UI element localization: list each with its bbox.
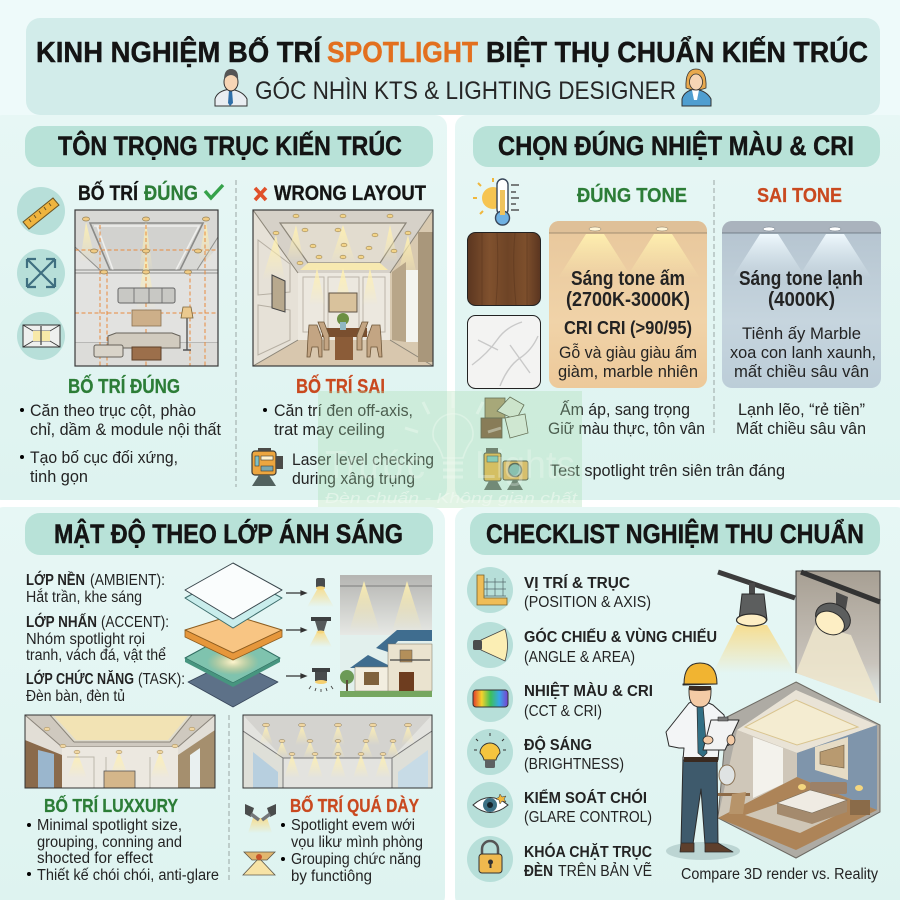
heading pill <box>473 126 880 167</box>
bullet list: correct <box>20 401 221 486</box>
note: warm result: Giữ màu thực, tôn vân <box>548 419 705 438</box>
check item: brightness <box>467 729 624 775</box>
icon: laser level <box>252 448 283 486</box>
check item: lock axis: KHÓA CHẶT TRỤC <box>524 842 652 861</box>
panel: tôn trọng trục kiến trúc <box>0 115 447 500</box>
icon: lighting designer <box>682 69 711 106</box>
layer text: accent: LỚP NHẤN <box>26 613 97 631</box>
title banner <box>26 18 880 115</box>
illustration: correct layout room <box>75 210 218 366</box>
layer text: task: (TASK): <box>138 671 185 688</box>
swatch: marble <box>468 316 540 388</box>
check item: glare control <box>467 782 652 828</box>
check item: lock axis: TRÊN BẢN VẼ <box>558 863 652 880</box>
illustration: engineer <box>666 663 740 860</box>
layer text: task <box>26 670 185 705</box>
heading pill: MẬT ĐỘ THEO LỚP ÁNH SÁNG <box>54 518 403 549</box>
bullet list: wrong: Căn trí đen off-axis, <box>274 401 413 420</box>
title: KINH NGHIỆM BỐ TRÍ <box>36 35 322 69</box>
bullet list: dense: vọu likư mình phòng <box>291 834 423 851</box>
bullet list: dense: Grouping chức năng <box>291 851 421 868</box>
card: warm tone <box>549 221 707 388</box>
illustration: villa with spotlights <box>340 575 432 697</box>
caption: bố trí đúng: BỐ TRÍ ĐÚNG <box>68 374 180 398</box>
heading pill: TÔN TRỌNG TRỤC KIẾN TRÚC <box>58 130 402 161</box>
layer text: accent: tranh, vách đá, vật thể <box>26 647 166 664</box>
watermark: Đèn chuẩn - Không gian chất <box>325 490 578 507</box>
layer text: accent <box>26 613 169 664</box>
icon: cross arrows <box>17 249 65 297</box>
title: BIỆT THỤ CHUẨN KIẾN TRÚC <box>486 35 868 69</box>
caption: bố trí quá dày: BỐ TRÍ QUÁ DÀY <box>290 795 420 816</box>
note: laser level: Laser level checking <box>292 450 434 469</box>
card: cold tone: xoa con lanh xaunh, <box>730 343 876 362</box>
card: warm tone: Gỗ và giàu giàu ấm <box>559 343 697 362</box>
check item: position and axis <box>467 567 651 613</box>
bullet list: dense: by functiông <box>291 868 372 885</box>
arrows <box>286 591 306 678</box>
bullet list: wrong: trat may ceiling <box>274 420 385 439</box>
check item: position and axis: (POSITION & AXIS) <box>524 594 651 611</box>
icon: ruler <box>17 187 65 235</box>
heading: sai tone: SAI TONE <box>757 184 842 207</box>
icon: accent spotlight <box>309 617 332 647</box>
card: cold tone: mất chiều sâu vân <box>734 362 869 381</box>
note: cold result: Lạnh lẽo, “rẻ tiền” <box>738 400 865 419</box>
note: laser level: during xâng trụng <box>292 469 415 488</box>
icon: material samples <box>481 397 528 438</box>
check item: position and axis: VỊ TRÍ & TRỤC <box>524 573 630 592</box>
layer text: ambient: LỚP NỀN <box>26 571 85 589</box>
card: warm tone: CRI CRI (>90/95) <box>564 318 692 338</box>
layer text: task: Đèn bàn, đèn tủ <box>26 688 125 705</box>
heading: wrong layout: WRONG LAYOUT <box>274 182 426 205</box>
check item: cct and cri: (CCT & CRI) <box>524 703 602 720</box>
bullet list: correct: Tạo bố cục đối xứng, <box>30 448 178 467</box>
icon: ambient downlight <box>307 578 334 607</box>
caption: compare render: Compare 3D render vs. Reality <box>681 866 878 883</box>
icon: paired spotlights <box>245 804 276 833</box>
caption: bố trí luxxury: BỐ TRÍ LUXXURY <box>44 795 179 816</box>
bullet list: luxury: Minimal spotlight size, <box>37 817 182 834</box>
check item: lock axis <box>467 836 652 882</box>
icon: grouped lights <box>243 852 275 875</box>
panel: checklist nghiệm thu chuẩn <box>455 507 900 900</box>
check item: angle and area <box>467 622 717 668</box>
divider <box>235 180 237 487</box>
title <box>36 35 868 69</box>
icon: sun thermometer <box>473 178 519 225</box>
layer text: ambient: Hắt trần, khe sáng <box>26 589 142 606</box>
heading pill <box>25 126 433 167</box>
bullet list: correct: Căn theo trục cột, phào <box>30 401 196 420</box>
subtitle: GÓC NHÌN KTS & LIGHTING DESIGNER <box>255 76 676 105</box>
watermark: Lights <box>475 444 575 487</box>
illustration: track spotlight <box>713 572 795 673</box>
swatch: wood <box>468 232 540 306</box>
heading pill <box>25 513 433 555</box>
icon: architect <box>215 69 247 106</box>
bullet list: luxury: shocted for effect <box>37 850 154 867</box>
watermark <box>318 391 582 508</box>
divider <box>228 715 230 880</box>
card: warm tone: (2700K-3000K) <box>566 289 690 311</box>
note: cold result: Mất chiều sâu vân <box>736 419 866 438</box>
panel: mật độ theo lớp ánh sáng <box>0 507 445 900</box>
check item: angle and area: GÓC CHIẾU & VÙNG CHIẾU <box>524 627 717 646</box>
note: warm result <box>548 400 705 438</box>
card: cold tone: Sáng tone lạnh <box>739 268 863 290</box>
watermark: Trước <box>325 444 425 487</box>
check item: lock axis: ĐÈN <box>524 861 553 880</box>
heading: bố trí đúng <box>78 181 223 205</box>
check item: cct and cri: NHIỆT MÀU & CRI <box>524 681 653 700</box>
bullet list: dense <box>281 817 423 885</box>
check item: cct and cri <box>467 676 653 722</box>
card: cold tone: (4000K) <box>768 289 835 311</box>
illustration: dense ceiling <box>243 715 432 788</box>
layer text: task: LỚP CHỨC NĂNG <box>26 670 134 688</box>
caption: bố trí sai: BỐ TRÍ SAI <box>296 374 385 398</box>
layer text: ambient: (AMBIENT): <box>90 572 165 589</box>
heading pill: CHỌN ĐÚNG NHIỆT MÀU & CRI <box>498 130 854 161</box>
heading pill <box>470 513 880 555</box>
check item: glare control: (GLARE CONTROL) <box>524 809 652 826</box>
heading: bố trí đúng: BỐ TRÍ <box>78 181 139 205</box>
card: cold tone <box>722 221 881 388</box>
bullet list: dense: Spotlight evem wới <box>291 817 415 834</box>
bullet list: wrong <box>263 401 413 439</box>
check item: brightness: (BRIGHTNESS) <box>524 756 624 773</box>
icon: room plan <box>17 312 65 360</box>
card: warm tone: giàm, marble nhiên <box>558 362 698 381</box>
illustration: 3d room cutaway <box>718 682 880 858</box>
illustration: luxury ceiling <box>25 715 215 788</box>
bullet list: luxury: grouping, conning and <box>37 834 182 851</box>
card: warm tone: Sáng tone ấm <box>571 268 685 290</box>
note: laser level <box>292 450 434 488</box>
icon: task light <box>309 668 333 692</box>
layer text: ambient <box>26 571 165 606</box>
bullet list: luxury <box>27 817 219 884</box>
icon: test camera <box>484 448 528 490</box>
card: cold tone: Tiênh ấy Marble <box>742 324 861 343</box>
note: cold result <box>736 400 866 438</box>
illustration: wall spotlight <box>796 571 880 703</box>
divider <box>713 180 715 435</box>
note: warm result: Ấm áp, sang trọng <box>560 400 690 419</box>
check item: brightness: ĐỘ SÁNG <box>524 735 592 754</box>
note: test spotlight: Test spotlight trên siên trân đáng <box>550 461 785 480</box>
heading: bố trí đúng: ĐÚNG <box>144 181 198 205</box>
illustration: wrong layout room <box>253 210 433 366</box>
heading: đúng tone: ĐÚNG TONE <box>577 183 687 207</box>
bullet list: luxury: Thiết kế chói chói, anti-glare <box>37 867 219 884</box>
check item: glare control: KIỂM SOÁT CHÓI <box>524 788 647 807</box>
panel: chọn đúng nhiệt màu và cri <box>455 115 900 500</box>
title: SPOTLIGHT <box>327 37 478 69</box>
bullet list: correct: tinh gọn <box>30 467 88 486</box>
top background band <box>0 0 900 115</box>
bullet list: correct: chỉ, dầm & module nội thất <box>30 420 221 439</box>
layer text: accent: (ACCENT): <box>101 614 169 631</box>
layer text: accent: Nhóm spotlight rọi <box>26 631 145 648</box>
check item: angle and area: (ANGLE & AREA) <box>524 649 635 666</box>
diagram: light layers <box>185 563 282 707</box>
